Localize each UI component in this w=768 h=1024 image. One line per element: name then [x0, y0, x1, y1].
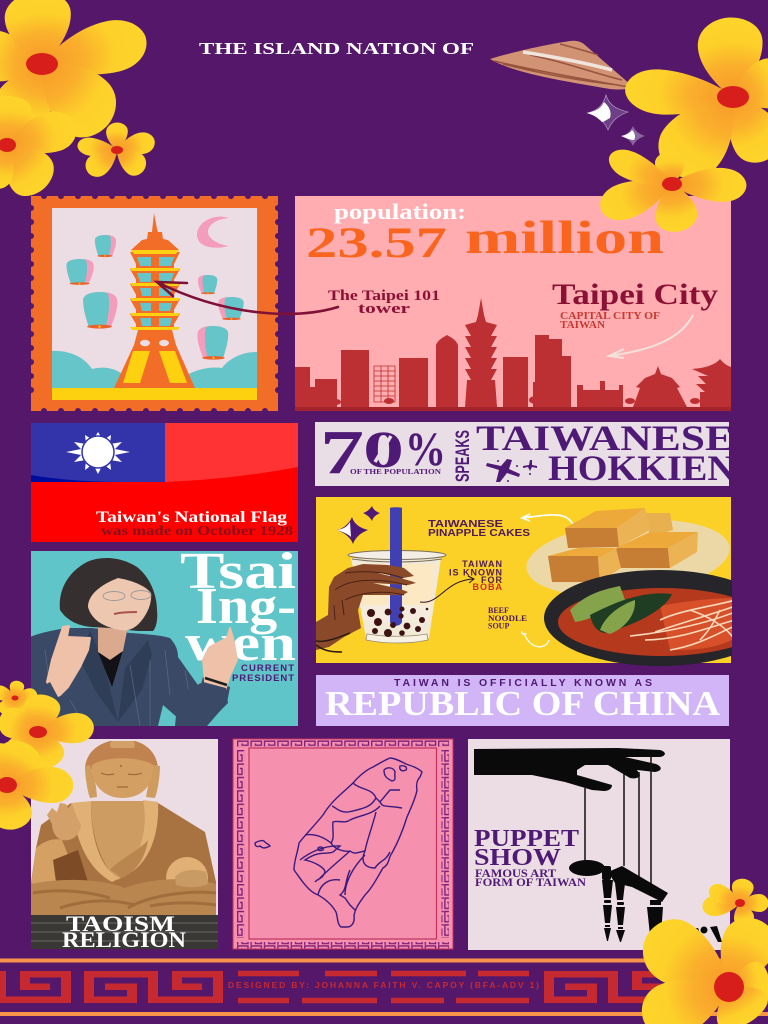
panel: president: [30, 543, 298, 726]
caption: officially known as: TAIWAN IS OFFICIALLY KNOWN AS: [394, 677, 652, 689]
left hand: [47, 626, 90, 697]
footer band: [0, 958, 768, 1016]
flower: left small: [0, 680, 38, 718]
heading: Taoism: TAOISM: [66, 911, 175, 936]
label: pineapple cakes: TAIWANESE: [428, 519, 503, 530]
flag sun: [66, 432, 130, 474]
heading: Puppet Show: [474, 826, 579, 871]
caption: current president: [232, 663, 294, 684]
stamp sky: [52, 208, 257, 400]
lantern 6: [197, 326, 228, 360]
arrow: city to skyline: [609, 315, 693, 358]
vertical word: speaks: SPEAKS: [453, 430, 474, 482]
label: pineapple cakes: [428, 520, 530, 536]
heading: Puppet Show: SHOW: [474, 845, 561, 871]
plate: [526, 520, 730, 592]
panel: language 70 percent: [315, 418, 735, 488]
caption: capital city: [560, 310, 660, 331]
name: Tsai Ing-wen: wen: [185, 615, 296, 672]
Taiwan outline: [255, 758, 422, 927]
lantern 2: [66, 259, 94, 285]
label: beef noodle soup: [488, 608, 526, 628]
heading: Puppet Show: PUPPET: [474, 826, 579, 852]
Buddha head: [85, 741, 158, 770]
caption: famous art form: FORM OF TAIWAN: [475, 875, 586, 889]
caption: current president: CURRENT: [241, 663, 294, 674]
wrist band: [316, 633, 350, 652]
name: Tsai Ing-wen: Ing-: [196, 578, 296, 635]
heading: Republic of China: REPUBLIC OF CHINA: [325, 684, 721, 723]
heading: Hokkien: HOKKIEN: [548, 448, 735, 488]
icon: puppeteer hand: [474, 748, 665, 791]
flower: top right medium: [595, 144, 747, 234]
label: known for boba: [450, 560, 502, 590]
icon: woven straw hat: [490, 41, 631, 90]
clouds: [52, 351, 257, 388]
left sleeve: [47, 682, 61, 698]
panel: map of Taiwan: [233, 739, 453, 949]
label: Taipei 101 tower: tower: [358, 301, 411, 317]
caption: famous art form: FAMOUS ART: [475, 866, 556, 880]
skyline silhouette: [295, 298, 731, 407]
flag canton: [31, 423, 165, 482]
ground band: [52, 388, 257, 400]
icon: planes: [486, 459, 537, 482]
panel: Taoism religion: [31, 739, 218, 952]
stamp perforations: [28, 193, 281, 414]
panel: population and Taipei skyline: [295, 196, 731, 411]
icon: sparkles: [337, 506, 380, 544]
name: Tsai Ing-wen: Tsai: [180, 543, 296, 600]
heading: Religion: RELIGION: [62, 927, 186, 952]
caption: of the population: OF THE POPULATION: [350, 468, 441, 476]
icon: sparkle stars: [587, 95, 645, 146]
flower: bottom right large: [630, 908, 768, 1024]
hand holding cup: [316, 564, 416, 650]
puppet figure: [569, 860, 722, 942]
panel: national flag: [31, 423, 298, 542]
panel: puppet show: [468, 739, 730, 950]
arrow: pineapple cakes: [520, 513, 574, 524]
grid building: [374, 366, 395, 402]
label: Taipei 101 tower: [328, 288, 440, 317]
sky lanterns: [95, 235, 116, 257]
boba cup: [348, 507, 446, 643]
puppet strings: [585, 755, 651, 895]
label: beef noodle soup: SOUP: [488, 622, 509, 630]
caption strip: [31, 915, 218, 949]
stamp frame: [31, 196, 278, 411]
panel: official name: [316, 675, 729, 726]
flower: top left large: [0, 0, 152, 150]
label: known for boba: FOR: [481, 575, 503, 585]
arrow: pointing to Taipei 101: [157, 282, 338, 314]
label: beef noodle soup: BEEF: [488, 606, 509, 615]
right hand: [203, 628, 237, 697]
flower: left large: [0, 734, 73, 833]
flower: top left medium: [0, 96, 81, 204]
heading: population label: population:: [334, 199, 466, 224]
arrow: noodle soup: [522, 631, 549, 647]
lantern 5: [218, 297, 244, 320]
heading: population number: [306, 212, 664, 267]
flower: left medium: [0, 692, 95, 774]
heading: Taipei City: Taipei City: [552, 278, 718, 311]
credit text: DESIGNED BY: JOHANNA FAITH V. CAPOY (BFA-ADV 1): [228, 980, 539, 990]
flower: top right large: [624, 16, 768, 192]
portrait of Tsai Ing-wen: [30, 558, 237, 726]
tower illustration: [114, 213, 195, 388]
panel: Taipei 101 stamp: [28, 193, 281, 414]
key border: [237, 740, 449, 948]
panel: food: [316, 497, 768, 666]
Buddha statue: [31, 741, 216, 915]
inner frame: [249, 748, 436, 939]
label: beef noodle soup: NOODLE: [488, 614, 527, 623]
stat: 70 percent: 7: [320, 419, 364, 487]
label: known for boba: IS KNOWN: [449, 568, 503, 578]
pineapple cakes: [548, 508, 698, 582]
stat: 70 percent: [325, 432, 442, 474]
label: known for boba: TAIWAN: [462, 559, 503, 569]
caption: current president: PRESIDENT: [232, 673, 294, 684]
heading: Taiwanese: TAIWANESE: [476, 418, 734, 458]
flag date: was made on October 1928: [101, 524, 293, 539]
lantern 3: [83, 292, 117, 328]
label: pineapple cakes: PINAPPLE CAKES: [428, 528, 530, 539]
arrow: boba: [420, 576, 474, 602]
title: THE ISLAND NATION OF: [199, 39, 474, 58]
noodle bowl: [544, 570, 732, 666]
heading: population number: 23.57: [306, 220, 447, 267]
stat: 70 percent: %: [405, 423, 446, 476]
flag caption: Taiwan's National Flag: [96, 509, 287, 526]
caption: famous art form: [475, 866, 586, 889]
flower: bottom right small: [701, 877, 768, 928]
stat: 70 percent: 0: [363, 422, 404, 479]
ground line: [295, 407, 731, 411]
label: Taipei 101 tower: The Taipei 101: [328, 288, 440, 304]
moon: [197, 217, 229, 248]
flower: top left small: [76, 122, 157, 182]
raised hand: [47, 803, 81, 840]
name: Tsai Ing-wen: [180, 543, 296, 672]
caption: capital city: CAPITAL CITY OF: [560, 310, 660, 322]
caption: capital city: TAIWAN: [560, 319, 605, 331]
label: known for boba: BOBA: [472, 582, 503, 592]
heading: population number: million: [465, 212, 664, 264]
lantern 4: [198, 275, 217, 294]
right cuff: [175, 682, 228, 726]
